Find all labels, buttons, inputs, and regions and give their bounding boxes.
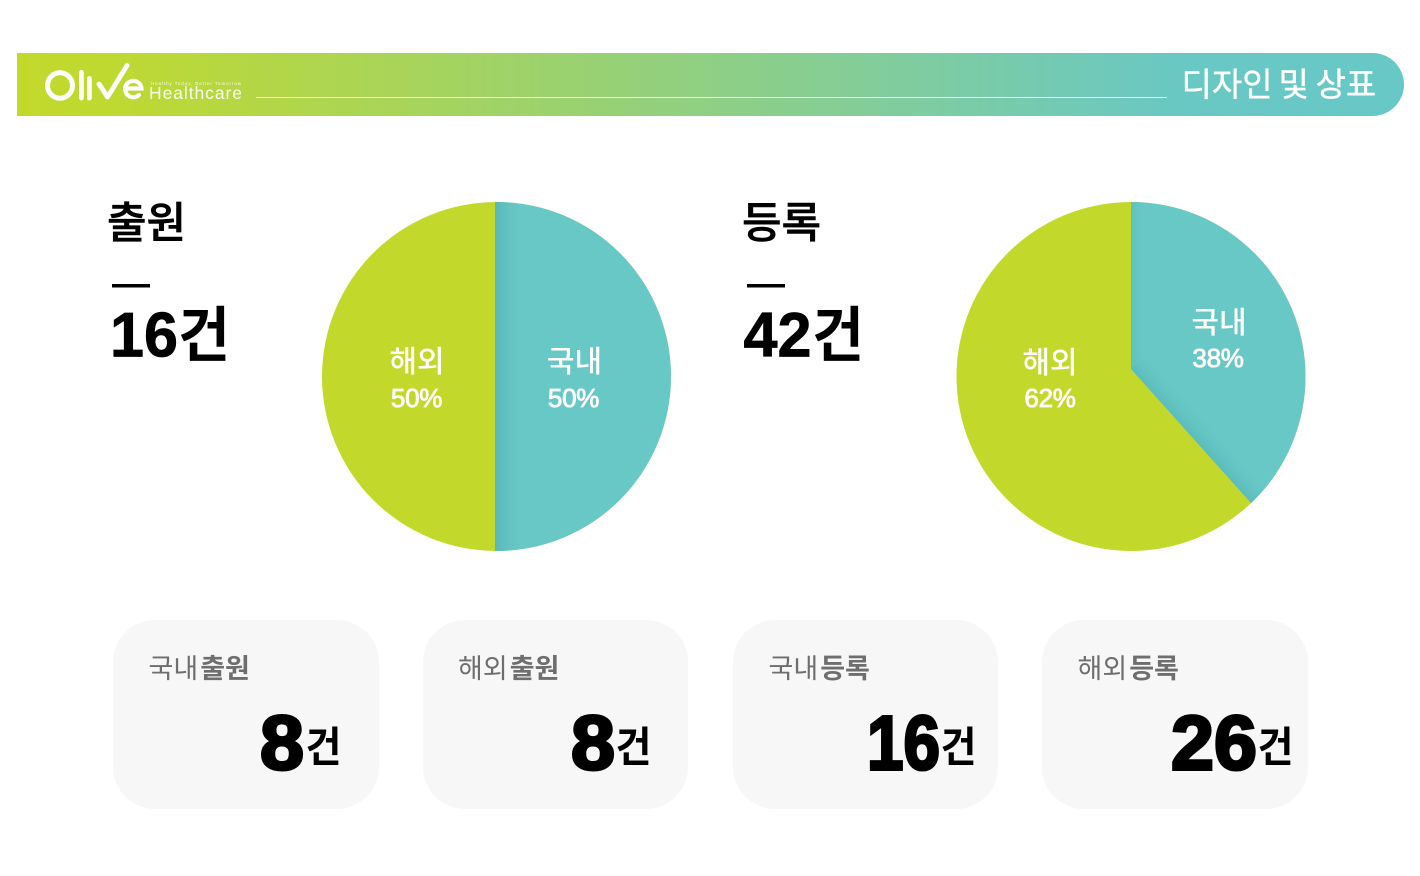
label: 해외 62%: 62% bbox=[1024, 383, 1076, 413]
pie chart: 출원 bbox=[322, 200, 675, 554]
label: 해외 62% bbox=[1022, 338, 1078, 413]
card: 해외 출원 bbox=[423, 620, 688, 809]
card: 해외 출원: 건 bbox=[616, 714, 652, 775]
card: 국내 등록: 건 bbox=[940, 714, 976, 775]
label: 국내 38%: 38% bbox=[1192, 343, 1244, 373]
card: 국내 등록: 국내등록 bbox=[768, 647, 870, 686]
logo: Olive Healthcare bbox=[48, 66, 242, 103]
card: 해외 출원: 8 bbox=[571, 700, 615, 786]
card: 국내 출원: 국내출원 bbox=[148, 647, 250, 686]
total: 16건: 건 bbox=[178, 288, 230, 374]
label: 국내 38% bbox=[1191, 298, 1247, 373]
card: 국내 출원: 건 bbox=[306, 714, 342, 775]
total: 42건: 42 bbox=[744, 300, 812, 370]
header title: 디자인 bbox=[1182, 58, 1273, 106]
label: 국내 50%: 국내 bbox=[547, 337, 602, 381]
label: 해외 50% bbox=[389, 337, 445, 413]
heading: 등록: 등록 bbox=[742, 189, 821, 251]
card: 해외 등록 bbox=[1042, 620, 1308, 809]
label: 해외 62%: 해외 bbox=[1022, 338, 1078, 382]
card: 국내 출원 bbox=[113, 620, 379, 809]
label: 국내 50% bbox=[547, 337, 602, 413]
card: 국내 등록: 16 bbox=[867, 700, 940, 786]
panel: 등록 summary bbox=[742, 189, 864, 374]
pie chart: 등록 bbox=[956, 200, 1320, 551]
card: 국내 등록 bbox=[733, 620, 998, 809]
header title: 및 bbox=[1278, 58, 1309, 106]
label: 국내 50%: 50% bbox=[548, 383, 599, 413]
total: 42건: 건 bbox=[812, 288, 864, 374]
card: 해외 출원: 해외출원 bbox=[458, 647, 559, 686]
header title: 상표 bbox=[1316, 58, 1376, 106]
logo: Olive Healthcare: Healthcare bbox=[149, 83, 242, 103]
total: 16건: 16 bbox=[110, 300, 178, 370]
label: 해외 50%: 50% bbox=[391, 383, 442, 413]
total: 42건 bbox=[744, 288, 864, 374]
card: 해외 등록: 건 bbox=[1258, 714, 1294, 775]
card: 국내 출원: 8 bbox=[260, 700, 304, 786]
label: 해외 50%: 해외 bbox=[389, 337, 445, 381]
card: 해외 등록: 26 bbox=[1171, 700, 1257, 786]
heading: 출원: 출원 bbox=[107, 189, 186, 251]
panel: 출원 summary bbox=[107, 189, 230, 374]
header banner bbox=[17, 53, 1404, 116]
card: 해외 등록: 해외등록 bbox=[1078, 647, 1179, 686]
logo: Olive Healthcare: Healthy Today, Better Tomorrow bbox=[151, 81, 242, 86]
label: 국내 38%: 국내 bbox=[1191, 298, 1247, 342]
total: 16건 bbox=[110, 288, 230, 374]
